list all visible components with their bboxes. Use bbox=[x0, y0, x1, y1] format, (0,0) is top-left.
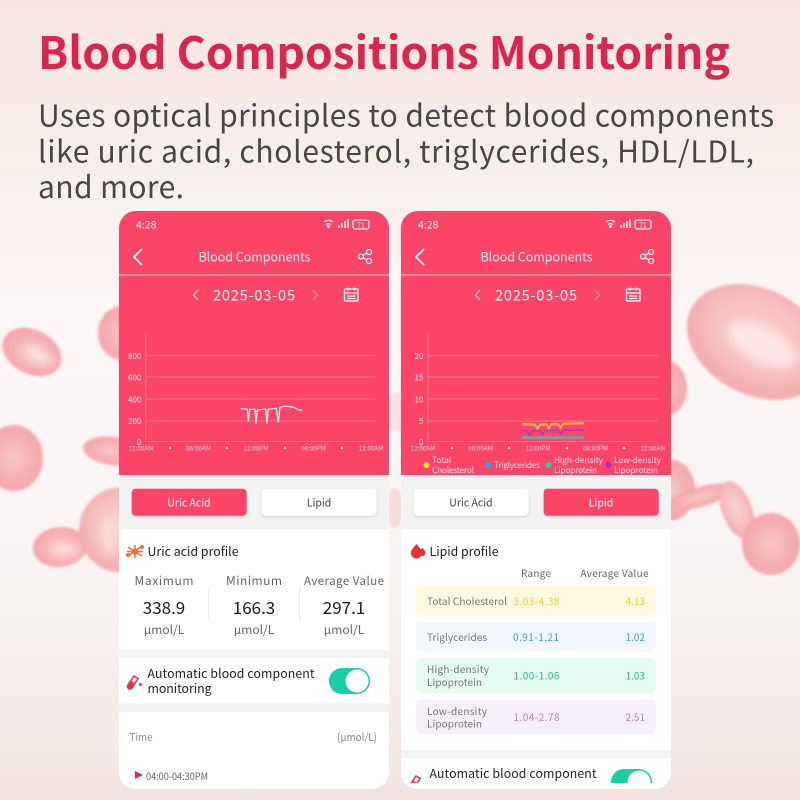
line chart: lipid: 06:00AM bbox=[468, 444, 493, 452]
stat: average value: 297.1 bbox=[323, 594, 365, 619]
icon: share bbox=[640, 250, 654, 264]
legend: total cholesterol: Total bbox=[432, 454, 451, 466]
line chart: lipid: 10 bbox=[414, 394, 424, 406]
back arrow bbox=[416, 249, 424, 265]
row: triglycerides bbox=[416, 622, 656, 652]
button: lipid bbox=[262, 489, 376, 516]
line chart: uric acid: 06:00PM bbox=[301, 444, 326, 452]
panel: lipid profile: Average Value bbox=[580, 565, 649, 580]
row: high-density lipoprotein: 1.03 bbox=[626, 668, 645, 682]
row: total cholesterol: Total Cholesterol bbox=[427, 593, 507, 608]
legend: high-density lipoprotein bbox=[546, 456, 603, 475]
line chart: uric acid: 600 bbox=[128, 372, 142, 384]
line chart: uric acid bbox=[128, 333, 383, 452]
panel: records table bbox=[119, 712, 389, 789]
line chart: uric acid: 200 bbox=[128, 416, 142, 427]
legend: high-density lipoprotein: High-density bbox=[554, 454, 604, 466]
row: triglycerides: 1.02 bbox=[626, 629, 645, 644]
panel: records table: (μmol/L) bbox=[337, 729, 377, 745]
panel: uric acid profile bbox=[119, 529, 389, 650]
panel: uric acid phone screen bbox=[119, 211, 389, 789]
panel: lipid profile bbox=[401, 529, 671, 750]
button: lipid active: Lipid bbox=[589, 496, 613, 510]
stat: minimum: Minimum bbox=[226, 572, 282, 589]
panel: lipid phone screen bbox=[401, 211, 671, 795]
icon: calendar bbox=[626, 288, 640, 301]
button: uric acid active bbox=[132, 489, 247, 516]
row: low-density lipoprotein: Lipoprotein bbox=[427, 716, 482, 730]
line chart: lipid: 15 bbox=[414, 372, 423, 384]
stat: minimum bbox=[227, 576, 281, 636]
toggle on bbox=[329, 668, 370, 694]
line chart: lipid: 20 bbox=[414, 351, 424, 362]
row: high-density lipoprotein: High-density bbox=[427, 661, 490, 676]
subtitle text block bbox=[38, 92, 774, 207]
chart legend bbox=[424, 456, 661, 475]
icon: test tube bbox=[410, 776, 420, 789]
legend: low-density lipoprotein: Low-density bbox=[614, 454, 662, 466]
line chart: lipid: 06:00PM bbox=[583, 444, 608, 452]
line chart: lipid: 12:00AM bbox=[411, 444, 435, 452]
toggle on bbox=[611, 769, 652, 795]
status icons: 71 bbox=[357, 220, 365, 230]
screen title: Blood Components bbox=[198, 246, 311, 266]
stat: maximum bbox=[136, 576, 192, 636]
status icons bbox=[324, 219, 369, 230]
line chart: uric acid: 06:00AM bbox=[186, 444, 211, 452]
legend: low-density lipoprotein: Lipoprotein bbox=[614, 464, 658, 476]
panel: automatic monitoring: Automatic blood component bbox=[148, 664, 315, 682]
row: total cholesterol: 3.03-4.38 bbox=[514, 593, 560, 608]
stat: average value: Average Value bbox=[304, 573, 384, 589]
row: high-density lipoprotein: Lipoprotein bbox=[427, 674, 482, 689]
line chart: uric acid: 12:00AM bbox=[129, 444, 153, 452]
status icons bbox=[606, 219, 651, 230]
phone header panel: 4:28 bbox=[136, 218, 157, 232]
phone header panel: 2025-03-05 bbox=[213, 284, 295, 306]
stat: maximum: 338.9 bbox=[143, 594, 185, 619]
button: uric acid: Uric Acid bbox=[449, 496, 493, 510]
stat: minimum: μmol/L bbox=[234, 621, 275, 638]
stat: maximum: μmol/L bbox=[144, 621, 185, 638]
line chart: lipid: 0 bbox=[419, 437, 424, 448]
date selector bbox=[194, 290, 318, 300]
row: low-density lipoprotein bbox=[416, 700, 656, 734]
status icons: 71 bbox=[639, 220, 647, 230]
legend: high-density lipoprotein: Lipoprotein bbox=[554, 464, 597, 476]
line chart: uric acid: 0 bbox=[137, 437, 142, 448]
icon: share bbox=[358, 250, 372, 264]
panel: uric acid profile: Uric acid profile bbox=[148, 542, 239, 560]
decorative red blood cells bbox=[0, 261, 800, 575]
phone header panel: 4:28 bbox=[418, 218, 439, 232]
panel: automatic monitoring: monitoring bbox=[148, 679, 212, 697]
panel: records table: Time bbox=[130, 729, 152, 745]
stat: maximum: Maximum bbox=[134, 572, 194, 589]
button: lipid active bbox=[544, 489, 659, 516]
back arrow bbox=[134, 249, 142, 265]
panel: records table: 04:00-04:30PM bbox=[146, 768, 208, 783]
stat: average value bbox=[304, 573, 384, 638]
row: low-density lipoprotein: Low-density bbox=[427, 703, 488, 718]
row: triglycerides: Triglycerides bbox=[427, 629, 487, 644]
row: total cholesterol bbox=[416, 586, 656, 616]
legend: low-density lipoprotein bbox=[606, 456, 661, 475]
button: lipid: Lipid bbox=[307, 496, 331, 510]
line chart: uric acid: 800 bbox=[128, 351, 142, 362]
icon: test tube bbox=[128, 676, 142, 689]
button: uric acid bbox=[414, 489, 529, 516]
legend: total cholesterol bbox=[424, 456, 474, 473]
line chart: uric acid: 12:00PM bbox=[244, 444, 268, 452]
icon: calendar bbox=[344, 288, 358, 301]
button: uric acid active: Uric Acid bbox=[167, 496, 211, 510]
legend: triglycerides bbox=[485, 461, 540, 470]
subtitle text block: like uric acid, cholesterol, triglycerides, HDL/LDL, bbox=[38, 128, 754, 172]
panel: automatic monitoring (cut off) bbox=[401, 758, 671, 795]
panel: automatic monitoring bbox=[119, 658, 389, 704]
phone header panel bbox=[401, 211, 671, 475]
phone header panel: 2025-03-05 bbox=[495, 284, 577, 306]
stat: average value: μmol/L bbox=[324, 621, 365, 638]
panel: lipid profile: Lipid profile bbox=[430, 542, 499, 560]
legend: total cholesterol: Cholesterol bbox=[432, 464, 474, 476]
row: high-density lipoprotein bbox=[416, 658, 656, 693]
phone header panel bbox=[119, 211, 389, 475]
row: triglycerides: 0.91-1.21 bbox=[513, 629, 559, 644]
panel: lipid profile: Range bbox=[521, 565, 551, 580]
stat: minimum: 166.3 bbox=[233, 594, 275, 619]
line chart: lipid: 5 bbox=[419, 416, 423, 427]
icon: molecule bbox=[127, 545, 143, 558]
panel: automatic monitoring (cut off): Automatic blood component bbox=[430, 764, 597, 782]
subtitle text block: Uses optical principles to detect blood components bbox=[38, 92, 774, 136]
row: low-density lipoprotein: 2.51 bbox=[626, 709, 645, 724]
line chart: lipid bbox=[411, 333, 665, 452]
icon: blood drops bbox=[411, 544, 426, 558]
title: Blood Compositions Monitoring bbox=[38, 17, 730, 82]
line chart: lipid: 12:00AM bbox=[641, 444, 665, 452]
line chart: uric acid: 400 bbox=[128, 394, 142, 406]
screen title: Blood Components bbox=[480, 246, 593, 266]
line chart: uric acid: 12:00AM bbox=[359, 444, 383, 452]
line chart: lipid: 12:00PM bbox=[526, 444, 550, 452]
row: low-density lipoprotein: 1.04-2.78 bbox=[514, 709, 560, 724]
row: high-density lipoprotein: 1.00-1.06 bbox=[514, 668, 560, 682]
date selector bbox=[476, 290, 600, 300]
row: total cholesterol: 4.13 bbox=[626, 593, 645, 608]
subtitle text block: and more. bbox=[38, 163, 184, 207]
legend: triglycerides: Triglycerides bbox=[494, 459, 540, 471]
